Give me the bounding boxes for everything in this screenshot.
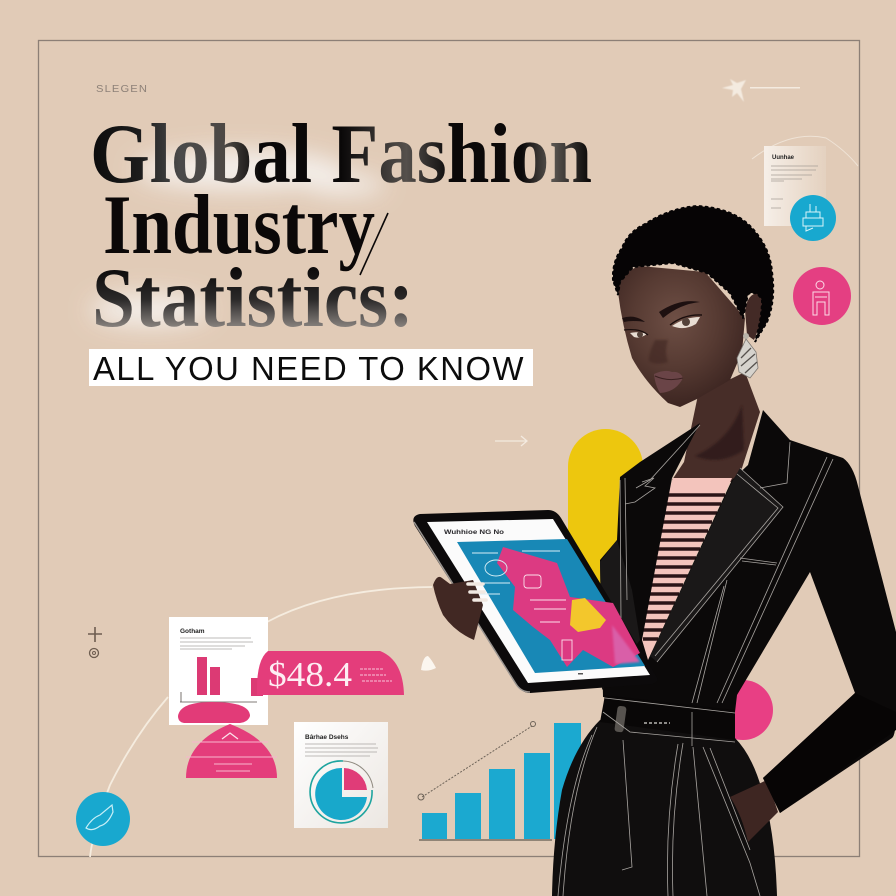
hand in pocket bbox=[730, 780, 778, 842]
trousers bbox=[552, 720, 777, 896]
pink hat shapes bbox=[178, 702, 277, 778]
yellow pill bbox=[568, 429, 643, 619]
belt bbox=[600, 695, 735, 746]
white curve bbox=[90, 587, 432, 857]
icon: plus and swirl bbox=[88, 627, 102, 658]
screen map bbox=[457, 539, 645, 673]
hair bbox=[613, 206, 773, 342]
eyebrows bbox=[622, 301, 700, 322]
icon: pink circle with figure bbox=[793, 267, 851, 325]
neck bbox=[672, 372, 760, 482]
woman figure bbox=[552, 206, 896, 896]
tablet bbox=[413, 510, 657, 693]
trouser stitching bbox=[558, 727, 760, 896]
nose bbox=[649, 340, 668, 364]
title line 1: Global Fashion bbox=[90, 107, 592, 201]
jacket stitching bbox=[620, 425, 833, 703]
subtitle band: ALL YOU NEED TO KNOW bbox=[93, 350, 525, 387]
title line 3: Statistics: bbox=[92, 251, 414, 345]
title line 2: Industry bbox=[103, 178, 375, 272]
title block bbox=[90, 107, 592, 345]
bars bbox=[197, 657, 263, 696]
small document: Uunhae bbox=[772, 155, 795, 161]
ear bbox=[745, 293, 764, 340]
icon: blue circle bbox=[790, 195, 836, 241]
document: pie chart bbox=[294, 722, 388, 828]
icon: blue circle bottom left bbox=[76, 792, 130, 846]
hat crown bbox=[178, 702, 250, 723]
tablet screen bbox=[427, 519, 650, 683]
top right document cluster bbox=[752, 136, 858, 241]
jacket shading bbox=[600, 468, 783, 690]
small white shape bbox=[421, 656, 436, 671]
decorative arrow bbox=[495, 436, 527, 446]
bar chart: growth bbox=[418, 722, 581, 840]
document: pie chart: Bârhae Dsehs bbox=[305, 734, 349, 741]
earring bbox=[737, 333, 758, 378]
hat dome bbox=[186, 724, 277, 778]
icon: plane and line bbox=[722, 79, 800, 102]
trend line bbox=[418, 722, 536, 800]
faint arc bbox=[752, 136, 858, 166]
home indicator bbox=[578, 673, 583, 674]
small brand label: SLEGEN bbox=[96, 84, 148, 95]
document: bar chart bbox=[169, 617, 268, 725]
pink value label bbox=[257, 651, 404, 695]
pink value label: $48.4 bbox=[268, 655, 352, 694]
tablet body bbox=[413, 510, 657, 693]
pink circle bbox=[713, 680, 773, 740]
striped top bbox=[642, 478, 732, 660]
face bbox=[618, 266, 745, 407]
document: bar chart: Gotham bbox=[180, 628, 205, 635]
title glow bbox=[90, 150, 385, 326]
screen heading: Wuhhioe NG No bbox=[444, 529, 504, 536]
eyes bbox=[624, 315, 702, 338]
hand holding tablet bbox=[433, 577, 486, 640]
sleeve cuff bbox=[763, 693, 896, 813]
lips bbox=[654, 371, 683, 393]
pie bbox=[310, 761, 373, 823]
jacket bbox=[600, 410, 896, 813]
